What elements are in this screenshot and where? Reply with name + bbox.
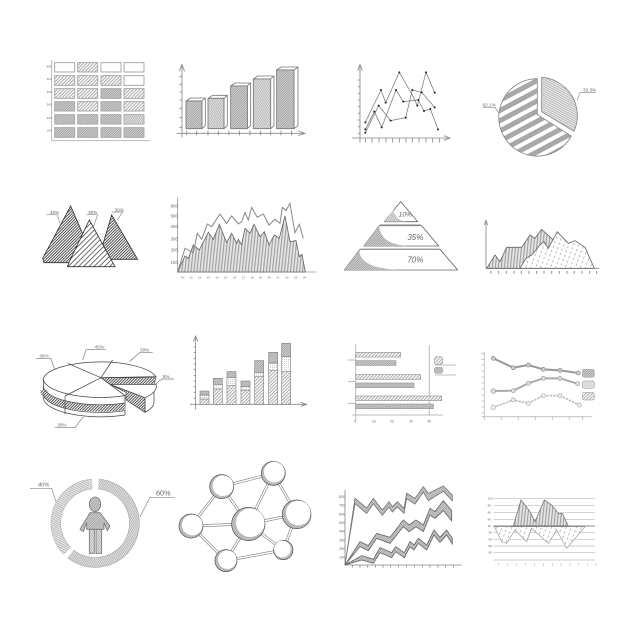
area filled series [178,216,305,272]
horizontal bars [356,352,442,409]
pyramid edge hatching [361,225,439,249]
table row labels: 200 [47,116,52,120]
network edges [191,473,297,561]
area x labels: 16 [233,275,237,279]
panel: ribbon area lines [339,486,462,568]
3D pie labels: 20% [57,422,67,427]
table axes [52,60,150,141]
pyramid labels: 70% [407,256,423,265]
3D pie labels: 30% [39,353,49,358]
low ribbon [345,530,452,565]
middle band line [491,376,580,393]
pyramid middle tier [364,226,439,246]
area y labels: 500 [171,213,178,218]
panel: donut with person [30,483,175,562]
top ribbon [345,486,452,565]
grid y labels: 40 [488,517,491,521]
icon: person [80,497,110,553]
table cells [55,63,144,137]
table row labels: 500 [47,77,52,81]
table row labels [47,64,52,133]
area x labels [181,275,307,279]
area x labels: 20 [267,275,271,279]
panel: area chart [171,197,317,279]
horizontal bar labels: 30 [409,419,413,423]
exposed cut wall [101,378,156,384]
area x labels: 13 [207,275,210,279]
area y labels: 200 [171,248,178,253]
low band line [491,394,581,410]
area y labels: 400 [171,224,178,229]
grid y labels: -60 [488,544,492,548]
table row labels: 300 [47,103,52,107]
pulled-out slice cut wall [110,384,145,412]
grid y labels: -40 [488,537,492,541]
horizontal bar labels: 40 [427,419,431,423]
panel: horizontal bar chart [348,344,456,423]
pie labels: 62.1% [483,102,496,107]
pie top surface [43,362,156,397]
donut right arc [71,484,134,562]
panel: molecule network [179,461,311,572]
area x labels: 17 [242,275,246,279]
positive peaks [513,500,568,526]
three line axes [481,352,592,420]
pie small slice [542,77,577,131]
ribbon y labels: 800 [339,495,345,499]
panel: positive negative area chart [488,496,596,566]
horizontal bar legend [434,357,456,375]
horizontal bar axes [348,344,443,421]
ribbon y labels: 100 [339,556,345,560]
donut left arc [56,484,92,551]
ribbon y labels: 700 [339,504,345,508]
pie labels [483,88,596,114]
panel: pyramid [344,202,458,270]
bar chart axes [177,65,305,137]
table row labels: 600 [47,64,52,68]
pyramid top shade [384,210,407,222]
pyramid bottom shade [344,249,400,270]
area top line [178,203,303,272]
area y labels [171,203,178,265]
ribbon y labels: 200 [339,547,345,551]
panel: 3D bar chart [177,65,305,137]
panel: line chart [352,65,450,143]
pyramid labels: 10% [399,212,412,219]
area x labels: 12 [198,275,202,279]
horizontal bar labels [354,419,431,423]
panel: 3D pie chart [36,345,174,428]
panel: overlapping triangles [43,206,138,267]
stacked bars [200,343,291,404]
ribbon y labels: 600 [339,512,345,516]
line series [365,72,438,133]
ribbon y labels: 500 [339,521,345,525]
zero line [493,525,595,527]
pie slice lines [65,360,113,396]
line chart axes [352,65,450,143]
panel: stacked bar chart [190,336,307,410]
panel: three line chart [481,352,594,420]
area y labels: 300 [171,237,178,242]
grid y labels: -80 [488,551,492,555]
donut labels: 40% [38,483,49,489]
donut labels: 60% [156,488,171,497]
pie large slice [499,79,571,156]
pulled-out slice top [110,384,156,398]
area x labels: 14 [215,275,219,279]
3D pie labels: 5% [163,374,169,379]
three line legend [582,369,594,400]
grid y labels: 20 [488,524,491,528]
middle ribbon [345,501,452,565]
3D pie labels: 45% [95,345,104,350]
front triangle [67,220,115,267]
horizontal bar labels: 20 [390,419,394,423]
grid y labels: 100 [488,496,493,500]
area x labels: 15 [224,275,228,279]
donut labels [30,483,175,517]
horizontal bar labels: 0 [354,419,356,423]
top band line [491,356,580,375]
left triangle [43,206,95,263]
pie side wall [43,378,125,417]
front mountain [520,232,594,268]
triangle labels [47,207,124,227]
pyramid top tier [384,202,418,222]
pulled-out slice wall [145,385,154,412]
network nodes [179,461,311,572]
area x labels: 11 [190,275,193,279]
grid y labels: -20 [488,531,492,535]
3D pie labels: 30% [140,347,149,352]
pie hatch band [43,390,125,408]
pie labels: 33.3% [583,88,596,93]
panel: overlapping mountains [484,220,599,274]
area y labels: 100 [171,260,178,265]
pie band edges [43,386,125,414]
triangle labels: 30% [88,210,97,215]
grid y labels: 80 [488,504,491,508]
pyramid labels: 35% [407,233,423,242]
back mountain [487,229,553,268]
table row labels: 400 [47,90,52,94]
back right triangle [98,215,138,259]
triangle labels: 30% [115,207,124,212]
data points [364,71,439,134]
area x labels: 19 [259,275,262,279]
stacked bar axes [190,336,307,410]
panel: table heat grid [47,60,150,141]
area axes [178,197,317,272]
grid y labels [488,496,493,555]
pyramid middle shade [364,226,410,246]
panel: pie chart [483,77,596,156]
area x labels: 22 [285,275,289,279]
ribbon y labels: 300 [339,538,345,542]
triangle labels: 40% [50,210,59,215]
ribbon axes [345,490,462,568]
3D pie labels [36,345,174,428]
pyramid labels [399,212,423,265]
horizontal bar labels: 10 [372,419,376,423]
area x labels: 21 [276,275,280,279]
mountain axes [484,220,599,268]
ribbon y labels [339,495,345,560]
ribbon y labels: 400 [339,530,345,534]
negative valleys [494,527,585,548]
grid lines [493,498,596,566]
pyramid bottom tier [344,249,458,270]
area x labels: 18 [250,275,254,279]
area x labels: 23 [294,275,298,279]
area x labels: 24 [303,275,307,279]
area x labels: 10 [181,275,185,279]
grid y labels: 60 [488,511,491,515]
3D bars [186,67,298,129]
table row labels: 100 [47,129,52,133]
area y labels: 600 [171,203,178,208]
mountain ticks [491,271,597,274]
